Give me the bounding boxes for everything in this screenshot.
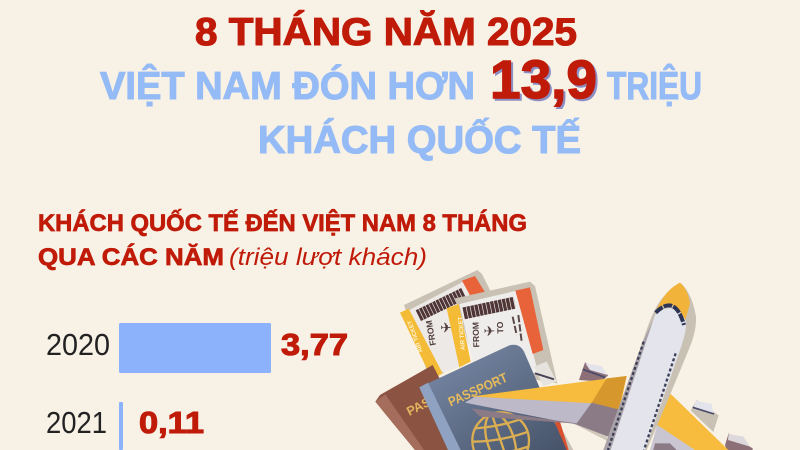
title line: Việt Nam đón hơn: VIỆT NAM ĐÓN HƠN xyxy=(100,64,475,108)
plane engines xyxy=(579,362,753,450)
icon: back air ticket: ✈ xyxy=(440,320,452,336)
icon: back air ticket xyxy=(400,270,493,379)
icon: back air ticket: AIR TICKET xyxy=(407,319,425,353)
big number shadow and value: 13,9 xyxy=(492,52,599,112)
icon: back air ticket: FROM xyxy=(424,320,438,346)
illustration: tickets, passports and plane xyxy=(375,270,753,450)
plane left wing xyxy=(465,376,627,442)
row 2020: 2020 xyxy=(46,327,110,362)
title line: khách quốc tế: KHÁCH QUỐC TẾ xyxy=(258,117,581,162)
icon: front air ticket xyxy=(447,282,557,386)
icon: brown passport: PASSPORT xyxy=(404,375,472,419)
title word: triệu: TRIỆU xyxy=(607,64,702,108)
icon: blue passport xyxy=(419,345,573,450)
icon: blue passport: PASSPORT xyxy=(446,370,510,409)
row 2021: 0,11 xyxy=(139,405,204,440)
plane right wing xyxy=(650,390,728,450)
icon: front air ticket: FROM xyxy=(470,322,481,348)
icon: front air ticket: ✈ xyxy=(483,323,495,339)
icon: brown passport xyxy=(375,365,477,450)
title block xyxy=(100,10,702,162)
icon: airplane xyxy=(465,283,753,450)
big number shadow and value: 13,9 xyxy=(490,50,597,110)
plane fuselage xyxy=(603,283,696,450)
plane nose xyxy=(656,283,690,320)
icon: front air ticket: AIR TICKET xyxy=(458,316,467,350)
icon: front air ticket: TO xyxy=(495,321,505,334)
cockpit windows xyxy=(656,305,684,325)
title line: 8 tháng năm 2025: 8 THÁNG NĂM 2025 xyxy=(195,10,577,54)
row 2021 xyxy=(46,402,204,450)
chart heading xyxy=(38,209,527,271)
row 2020: 3,77 xyxy=(281,327,348,362)
icon: gold globe xyxy=(472,410,529,450)
cabin windows xyxy=(608,342,676,450)
row 2020 xyxy=(46,323,348,373)
heading line 1: KHÁCH QUỐC TẾ ĐẾN VIỆT NAM 8 THÁNG xyxy=(38,209,527,237)
heading unit: (triệu lượt khách) xyxy=(229,244,427,271)
heading line 2: QUA CÁC NĂM xyxy=(38,243,224,271)
row 2021: 2021 xyxy=(46,405,107,440)
bar chart xyxy=(46,323,348,450)
